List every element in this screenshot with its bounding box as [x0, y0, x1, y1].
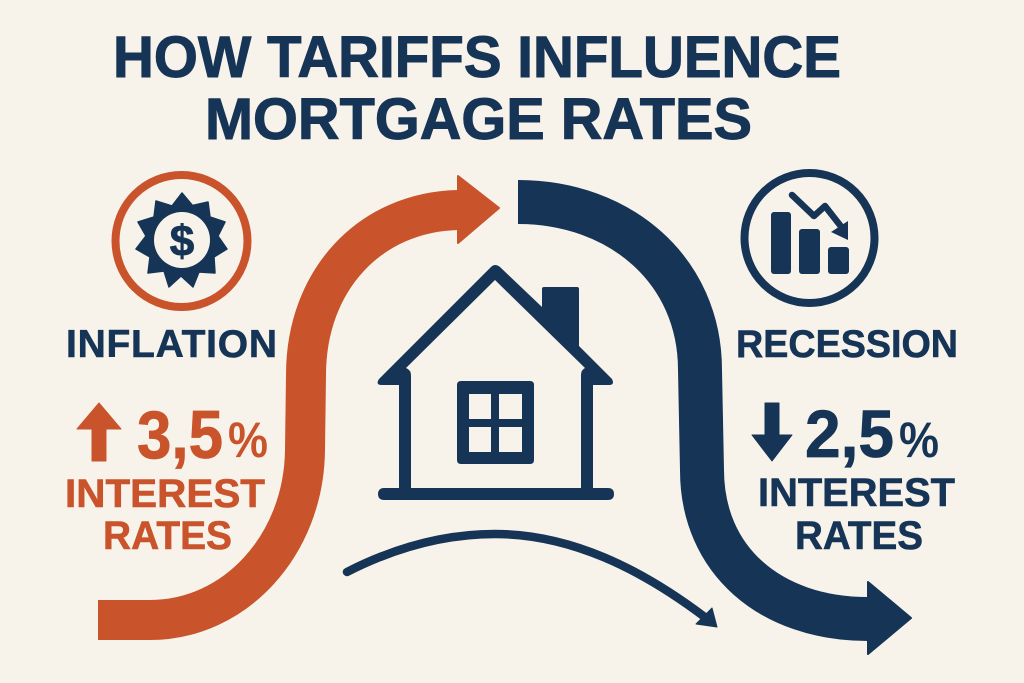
- text: interest rates right: [758, 471, 955, 558]
- icon: house: [378, 265, 614, 500]
- title: MORTGAGE RATES: [205, 87, 752, 152]
- stat: 3,5%: 3,5: [137, 397, 223, 473]
- stat: 2,5%: %: [899, 412, 939, 468]
- text: interest rates left: INTEREST: [65, 472, 265, 516]
- text: interest rates right: INTEREST: [758, 471, 955, 515]
- icon: house window: [457, 381, 534, 464]
- title: [113, 25, 841, 152]
- icon: dollar sign: $: [170, 217, 194, 266]
- icon: down arrow: [752, 403, 792, 461]
- label: inflation: INFLATION: [66, 323, 277, 366]
- icon: recession chart: [744, 173, 874, 303]
- text: interest rates right: RATES: [795, 514, 923, 558]
- stat: 3,5%: %: [228, 412, 268, 468]
- text: interest rates left: RATES: [103, 514, 232, 558]
- title: HOW TARIFFS INFLUENCE: [113, 25, 841, 90]
- stat: 2,5%: [805, 397, 939, 472]
- icon: inflation dollar badge: [116, 175, 248, 307]
- icon: up arrow: [77, 403, 121, 461]
- arrow: orange rising curve: [98, 176, 499, 620]
- arrow: small navy curve: [347, 534, 717, 627]
- arrow: navy falling curve: [518, 202, 911, 654]
- label: recession: RECESSION: [736, 323, 958, 366]
- stat: 2,5%: 2,5: [805, 397, 894, 472]
- text: interest rates left: [65, 472, 265, 558]
